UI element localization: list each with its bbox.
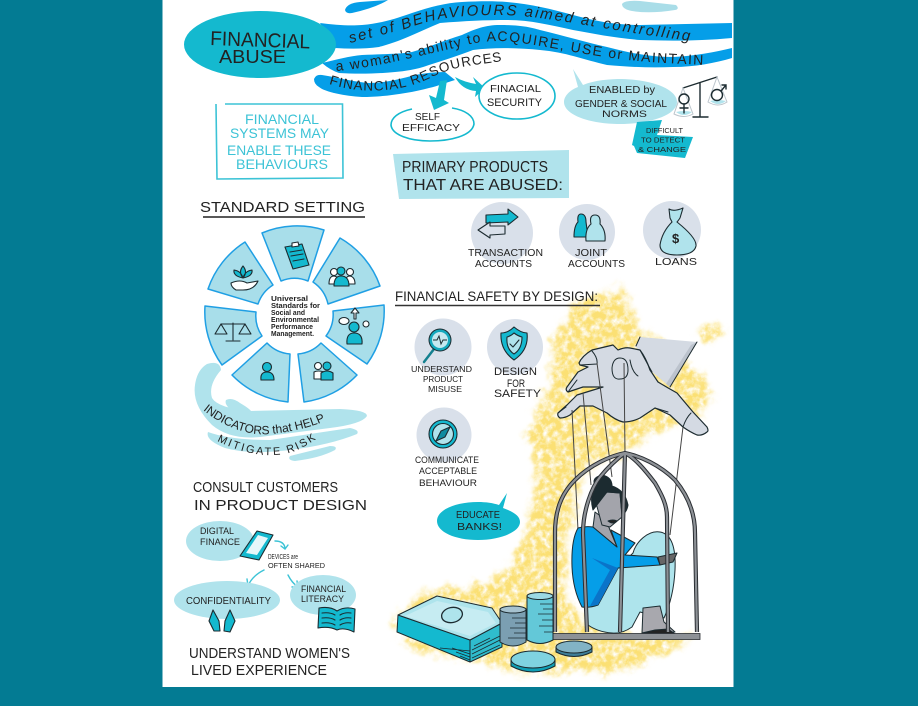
financial literacy bubble: LITERACY xyxy=(301,594,344,604)
safety: communicate acceptable behaviour: BEHAVIOUR xyxy=(419,478,477,489)
heading: primary products xyxy=(393,150,569,199)
icon: single person xyxy=(261,362,274,380)
enabled by gender and social norms bubble: NORMS xyxy=(602,109,647,120)
icon: open hands xyxy=(209,610,235,632)
enabled by gender and social norms bubble: GENDER & SOCIAL xyxy=(575,99,667,110)
wheel centre label: Management. xyxy=(271,329,314,338)
safety: design for safety xyxy=(487,319,543,400)
digital finance bubble: FINANCE xyxy=(200,537,240,548)
white poster page xyxy=(162,0,734,687)
financial security bubble xyxy=(479,73,555,119)
illustration: puppet strings xyxy=(572,363,683,535)
swoosh behind indicators xyxy=(195,363,367,461)
heading: primary products: THAT ARE ABUSED: xyxy=(403,177,563,194)
product: transaction accounts: ACCOUNTS xyxy=(475,259,532,270)
heading: understand women's lived experience: UNDERSTAND WOMEN'S xyxy=(189,645,350,662)
safety: design for safety: SAFETY xyxy=(494,388,542,400)
product: loans: $ xyxy=(672,231,680,246)
product: transaction accounts xyxy=(468,202,543,270)
indicators text xyxy=(204,404,323,456)
illustration: coin stacks xyxy=(500,592,592,672)
enabled by gender and social norms bubble: ENABLED by xyxy=(589,85,655,96)
title bubble: financial abuse: ABUSE xyxy=(219,47,286,67)
icon: gender scales xyxy=(674,77,727,117)
wheel centre label: Social and xyxy=(271,308,305,317)
product: transaction accounts: TRANSACTION xyxy=(468,248,543,259)
arrow to self efficacy xyxy=(429,80,449,110)
financial literacy bubble: FINANCIAL xyxy=(301,584,346,594)
self efficacy bubble: EFFICACY xyxy=(402,122,460,134)
safety: understand product misuse: UNDERSTAND xyxy=(411,364,472,374)
devices are often shared note: OFTEN SHARED xyxy=(268,563,325,570)
safety: understand product misuse xyxy=(411,318,472,394)
illustration: puppeteer hand xyxy=(558,337,708,435)
top wavy bands xyxy=(314,0,732,97)
devices are often shared note: DEVICES are xyxy=(268,554,298,561)
educate banks speech bubble: EDUCATE xyxy=(456,509,500,521)
icon: hand with plant xyxy=(231,266,258,290)
educate banks speech bubble: BANKS! xyxy=(457,521,502,533)
icon: person with thoughts xyxy=(339,308,369,344)
illustration: birdcage xyxy=(547,453,700,640)
financial security bubble: SECURITY xyxy=(487,97,543,109)
callout box: financial systems: ENABLE THESE xyxy=(227,142,331,158)
title bubble: financial abuse: FINANCIAL xyxy=(210,28,311,53)
indicators text: MITIGATE RISK xyxy=(218,433,316,456)
icon: scales of justice xyxy=(215,323,251,341)
arrows from devices note xyxy=(247,541,298,587)
wheel centre label xyxy=(271,294,320,338)
confidentiality bubble xyxy=(174,581,280,619)
illustration: banknotes xyxy=(397,596,502,662)
product: loans xyxy=(643,201,701,268)
safety: understand product misuse: MISUSE xyxy=(428,384,462,394)
wheel centre label: Universal xyxy=(271,294,308,303)
callout box: financial systems: FINANCIAL xyxy=(245,111,319,127)
safety: design for safety: DESIGN xyxy=(494,366,537,378)
safety: understand product misuse: PRODUCT xyxy=(423,374,463,384)
self efficacy bubble xyxy=(391,108,474,141)
digital finance bubble xyxy=(186,521,254,561)
wheel centre label: Environmental xyxy=(271,315,319,324)
wheel centre label: Performance xyxy=(271,322,313,331)
definition text along bands: set of BEHAVIOURS aimed at controlling xyxy=(350,4,690,44)
arrow to financial security xyxy=(455,77,485,97)
product: joint accounts: ACCOUNTS xyxy=(568,259,625,270)
heading: consult customers xyxy=(193,479,367,514)
definition text along bands: a woman's ability to ACQUIRE, USE or MAINTAIN xyxy=(336,31,702,71)
wheel segments xyxy=(205,226,384,402)
product: loans: LOANS xyxy=(655,256,697,268)
safety: communicate acceptable behaviour: COMMUNICATE xyxy=(415,455,479,466)
yellow paint splash xyxy=(392,288,724,672)
heading: primary products: PRIMARY PRODUCTS xyxy=(402,159,548,176)
enabled by gender and social norms bubble xyxy=(564,69,677,124)
title bubble: financial abuse xyxy=(184,11,336,78)
educate banks speech bubble xyxy=(437,493,520,540)
heading: standard setting: STANDARD SETTING xyxy=(200,200,365,216)
heading: consult customers: CONSULT CUSTOMERS xyxy=(193,479,338,496)
icon: open book xyxy=(318,607,355,632)
self efficacy bubble: SELF xyxy=(415,111,440,123)
heading: understand women's lived experience: LIVED EXPERIENCE xyxy=(191,662,327,679)
wheel centre label: Standards for xyxy=(271,301,320,310)
confidentiality bubble: CONFIDENTIALITY xyxy=(186,595,271,607)
financial literacy bubble xyxy=(290,575,356,615)
callout box: financial systems: SYSTEMS MAY xyxy=(230,125,330,141)
illustration: woman xyxy=(572,475,677,634)
icon: phone xyxy=(240,531,273,560)
callout box: financial systems xyxy=(216,104,343,179)
icon: clipboard xyxy=(285,242,309,269)
devices are often shared note xyxy=(268,554,325,570)
icon: three people xyxy=(329,267,355,286)
safety: communicate acceptable behaviour: ACCEPTABLE xyxy=(419,466,477,477)
heading: understand women's lived experience xyxy=(189,645,350,679)
difficult to detect and change arrow xyxy=(632,120,693,158)
heading: consult customers: IN PRODUCT DESIGN xyxy=(194,497,367,514)
digital finance bubble: DIGITAL xyxy=(200,526,234,537)
icon: two people xyxy=(314,362,333,380)
indicators text: INDICATORS that HELP xyxy=(204,404,323,434)
financial security bubble: FINACIAL xyxy=(490,84,541,95)
safety: communicate acceptable behaviour xyxy=(415,408,479,489)
difficult to detect and change arrow: TO DETECT xyxy=(641,136,685,144)
definition text along bands xyxy=(330,4,702,91)
product: joint accounts: JOINT xyxy=(575,248,607,259)
product: joint accounts xyxy=(559,204,625,270)
difficult to detect and change arrow: & CHANGE xyxy=(638,145,686,154)
difficult to detect and change arrow: DIFFICULT xyxy=(646,126,683,135)
callout box: financial systems: BEHAVIOURS xyxy=(236,156,328,172)
standards wheel xyxy=(195,226,384,461)
heading: financial safety by design: FINANCIAL SAFETY BY DESIGN: xyxy=(395,288,598,304)
definition text along bands: FINANCIAL RESOURCES xyxy=(330,52,501,91)
safety: design for safety: FOR xyxy=(507,378,525,390)
light accent stroke top right xyxy=(622,1,678,12)
